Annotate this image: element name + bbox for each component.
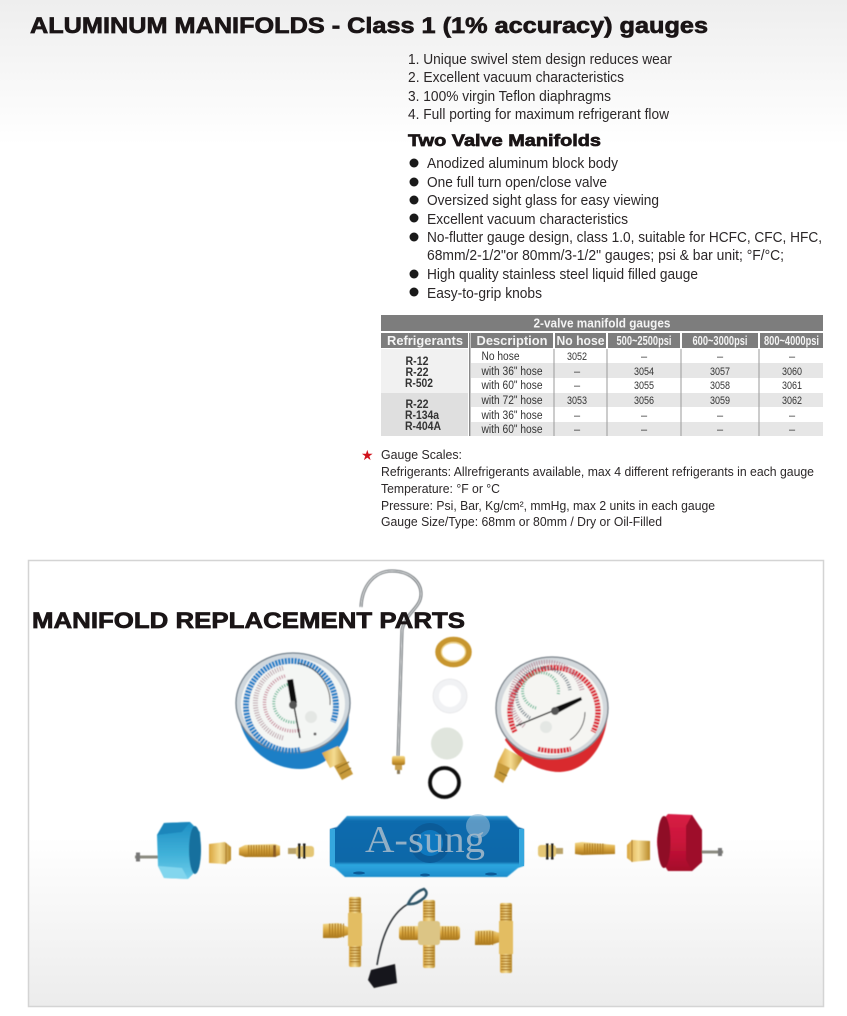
table: 2-valve manifold gauges: with 36" hose bbox=[481, 410, 542, 422]
table: 2-valve manifold gauges: R-134a bbox=[405, 410, 440, 422]
icon: left valve parts bbox=[209, 842, 314, 864]
icon: red gauge bbox=[494, 657, 608, 783]
feature list: 2. Excellent vacuum characteristics bbox=[408, 70, 624, 86]
table: 2-valve manifold gauges: Description bbox=[476, 333, 548, 348]
heading: manifold replacement parts: MANIFOLD REPLACEMENT PARTS bbox=[32, 608, 465, 633]
gauge scales notes: Gauge Size/Type: 68mm or 80mm / Dry or Oil-Filled bbox=[381, 514, 662, 529]
table: 2-valve manifold gauges: 3062 bbox=[782, 395, 802, 407]
panel: replacement parts bbox=[28, 560, 824, 1006]
table: 2-valve manifold gauges: – bbox=[717, 424, 724, 436]
table: 2-valve manifold gauges: R-22 bbox=[406, 367, 428, 379]
table: 2-valve manifold gauges: – bbox=[641, 424, 648, 436]
table: 2-valve manifold gauges: 2-valve manifold gauges bbox=[534, 316, 670, 330]
table: 2-valve manifold gauges: 3059 bbox=[710, 395, 730, 407]
table: 2-valve manifold gauges: with 72" hose bbox=[481, 395, 542, 407]
table: 2-valve manifold gauges: No hose bbox=[556, 333, 604, 348]
icon: red star: ★ bbox=[361, 448, 374, 464]
table: 2-valve manifold gauges: with 60" hose bbox=[481, 424, 542, 436]
table: 2-valve manifold gauges: R-502 bbox=[405, 378, 433, 390]
bullet list: Anodized aluminum block body bbox=[427, 156, 619, 172]
gauge scales notes: Pressure: Psi, Bar, Kg/cm², mmHg, max 2 units in each gauge bbox=[381, 498, 715, 513]
table: 2-valve manifold gauges: 3061 bbox=[782, 380, 802, 392]
gauge scales notes bbox=[381, 447, 814, 529]
table: 2-valve manifold gauges: with 36" hose bbox=[481, 366, 542, 378]
title: ALUMINUM MANIFOLDS - Class 1 (1% accuracy) gauges bbox=[30, 13, 708, 38]
table: 2-valve manifold gauges: – bbox=[789, 351, 796, 363]
icon: right tee fitting bbox=[475, 903, 513, 973]
table: 2-valve manifold gauges: – bbox=[574, 424, 581, 436]
table: 2-valve manifold gauges: 3060 bbox=[782, 366, 802, 378]
bullet list: No-flutter gauge design, class 1.0, suitable for HCFC, CFC, HFC, bbox=[427, 230, 822, 246]
table: 2-valve manifold gauges: Refrigerants bbox=[387, 333, 463, 348]
bullet list: One full turn open/close valve bbox=[427, 175, 607, 191]
icon: dust cap with strap bbox=[368, 889, 426, 988]
icon: seal rings bbox=[430, 640, 468, 797]
table: 2-valve manifold gauges: – bbox=[641, 351, 648, 363]
bullet list: Excellent vacuum characteristics bbox=[427, 212, 628, 228]
table: 2-valve manifold gauges: No hose bbox=[482, 351, 520, 363]
icon: blue manifold block: A-sung bbox=[365, 819, 485, 861]
table: 2-valve manifold gauges: 3056 bbox=[634, 395, 654, 407]
table: 2-valve manifold gauges: 3058 bbox=[710, 380, 730, 392]
table: 2-valve manifold gauges: 800~4000psi bbox=[764, 333, 819, 348]
table: 2-valve manifold gauges: 3057 bbox=[710, 366, 730, 378]
icon: cross fitting bbox=[399, 900, 460, 968]
icon: blue gauge bbox=[236, 653, 353, 780]
icon: hook probe bbox=[361, 571, 421, 774]
bullet list bbox=[410, 156, 822, 302]
feature list: 1. Unique swivel stem design reduces wear bbox=[408, 52, 672, 68]
table: 2-valve manifold gauges: 3055 bbox=[634, 380, 654, 392]
table: 2-valve manifold gauges: 3054 bbox=[634, 366, 654, 378]
icon: left tee fitting bbox=[323, 897, 362, 967]
icon: blue knob bbox=[135, 822, 201, 879]
table: 2-valve manifold gauges: – bbox=[789, 424, 796, 436]
feature list: 3. 100% virgin Teflon diaphragms bbox=[408, 89, 611, 105]
heading: two valve manifolds: Two Valve Manifolds bbox=[408, 131, 601, 150]
table: 2-valve manifold gauges: – bbox=[789, 410, 796, 422]
bullet list: Oversized sight glass for easy viewing bbox=[427, 193, 659, 209]
table: 2-valve manifold gauges bbox=[381, 315, 823, 436]
table: 2-valve manifold gauges: 600~3000psi bbox=[692, 333, 748, 348]
table: 2-valve manifold gauges: with 60" hose bbox=[481, 380, 542, 392]
gauge scales notes: Gauge Scales: bbox=[381, 447, 462, 462]
table: 2-valve manifold gauges: – bbox=[717, 410, 724, 422]
table: 2-valve manifold gauges: R-12 bbox=[406, 356, 428, 368]
icon: blue manifold block bbox=[330, 814, 524, 877]
feature list bbox=[408, 52, 672, 123]
gauge scales notes: Refrigerants: Allrefrigerants available, max 4 different refrigerants in each gauge bbox=[381, 464, 814, 479]
table: 2-valve manifold gauges: – bbox=[641, 410, 648, 422]
bullet list: Easy-to-grip knobs bbox=[427, 286, 542, 302]
table: 2-valve manifold gauges: – bbox=[574, 410, 581, 422]
table: 2-valve manifold gauges: R-22 bbox=[406, 399, 428, 411]
table: 2-valve manifold gauges: – bbox=[574, 380, 581, 392]
gauge scales notes: Temperature: °F or °C bbox=[381, 481, 500, 496]
table: 2-valve manifold gauges: 3053 bbox=[567, 395, 587, 407]
table: 2-valve manifold gauges: – bbox=[717, 351, 724, 363]
feature list: 4. Full porting for maximum refrigerant flow bbox=[408, 107, 669, 123]
icon: right valve parts bbox=[538, 840, 650, 862]
table: 2-valve manifold gauges: 500~2500psi bbox=[616, 333, 672, 348]
table: 2-valve manifold gauges: – bbox=[574, 366, 581, 378]
bullet list: High quality stainless steel liquid filled gauge bbox=[427, 267, 698, 283]
table: 2-valve manifold gauges: R-404A bbox=[405, 421, 441, 433]
bullet list: 68mm/2-1/2"or 80mm/3-1/2" gauges; psi & bar unit; °F/°C; bbox=[427, 248, 784, 264]
icon: red knob bbox=[657, 814, 723, 871]
table: 2-valve manifold gauges: 3052 bbox=[567, 351, 587, 363]
